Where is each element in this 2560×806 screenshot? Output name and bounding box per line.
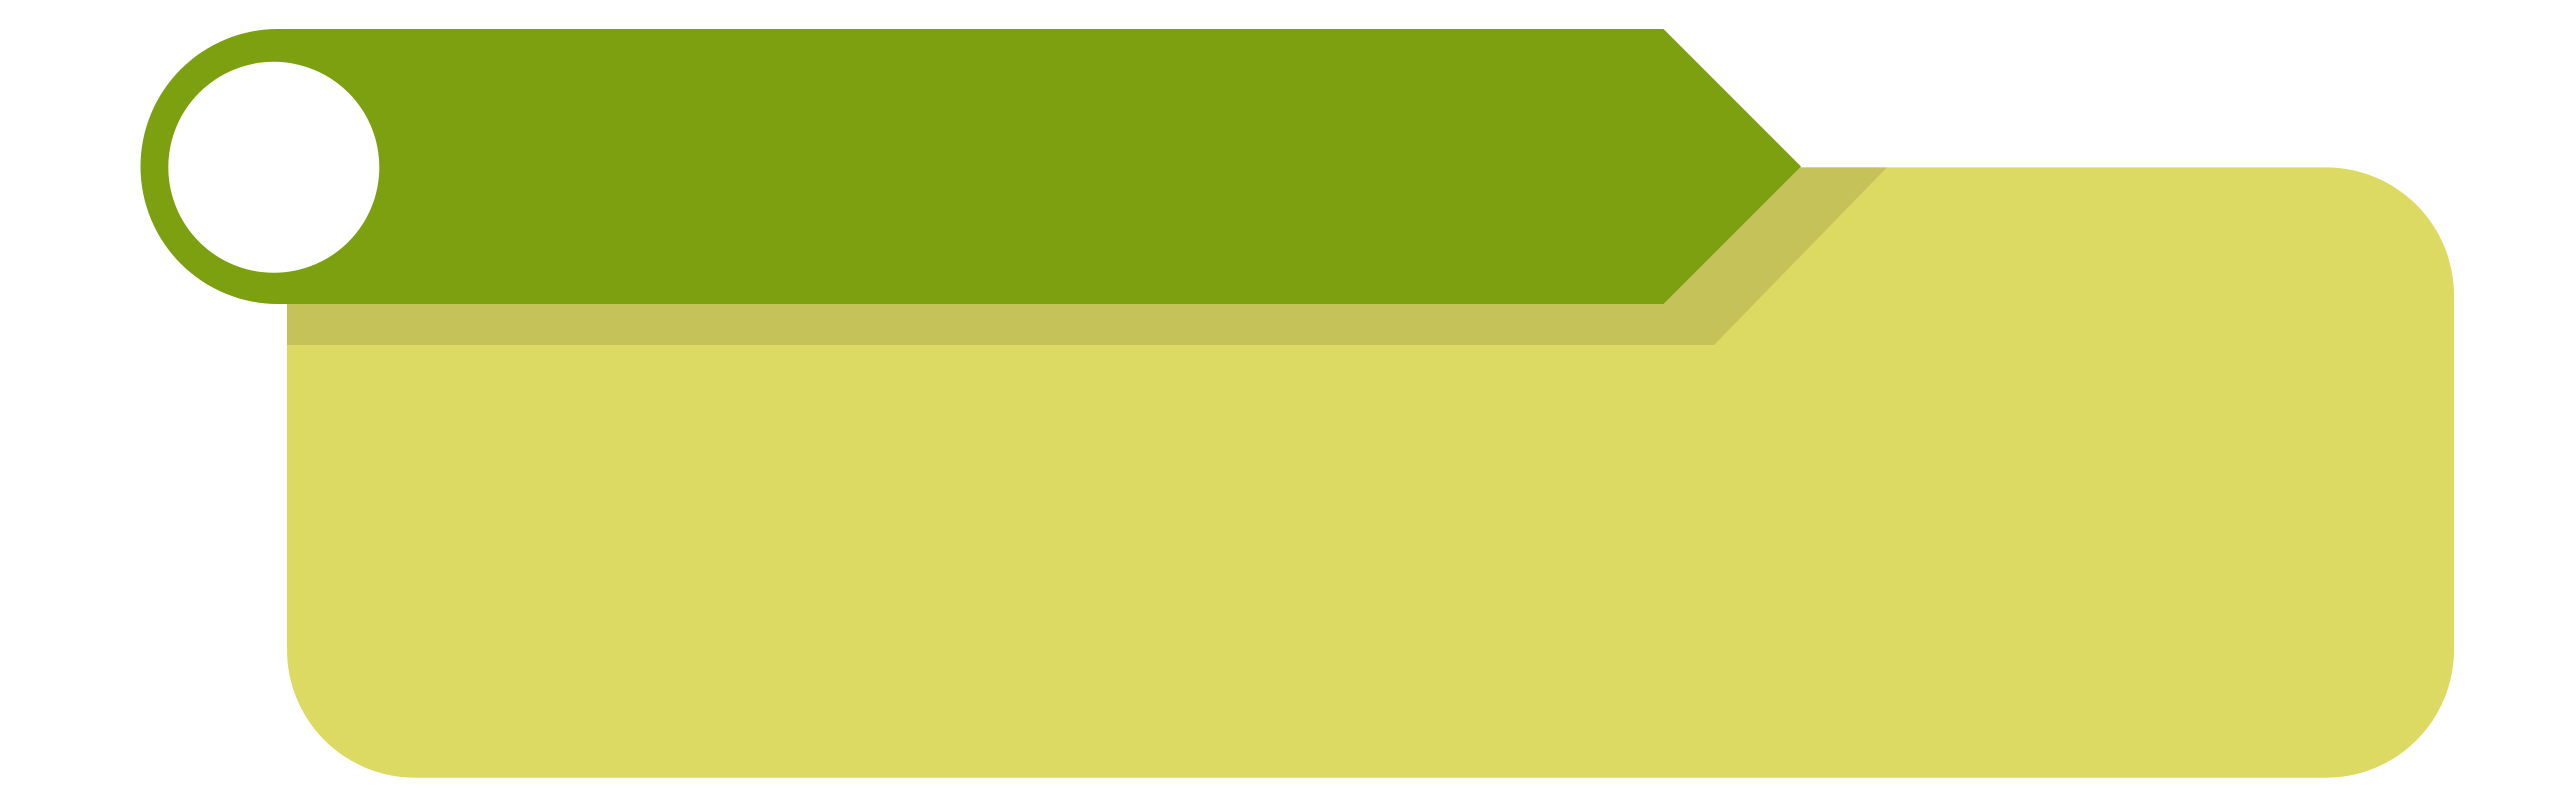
icon: white circle badge	[168, 62, 379, 273]
panel: yellow content card	[287, 167, 2454, 778]
drop shadow of header ribbon	[287, 167, 1887, 345]
header ribbon: green arrow tab	[140, 29, 1801, 304]
